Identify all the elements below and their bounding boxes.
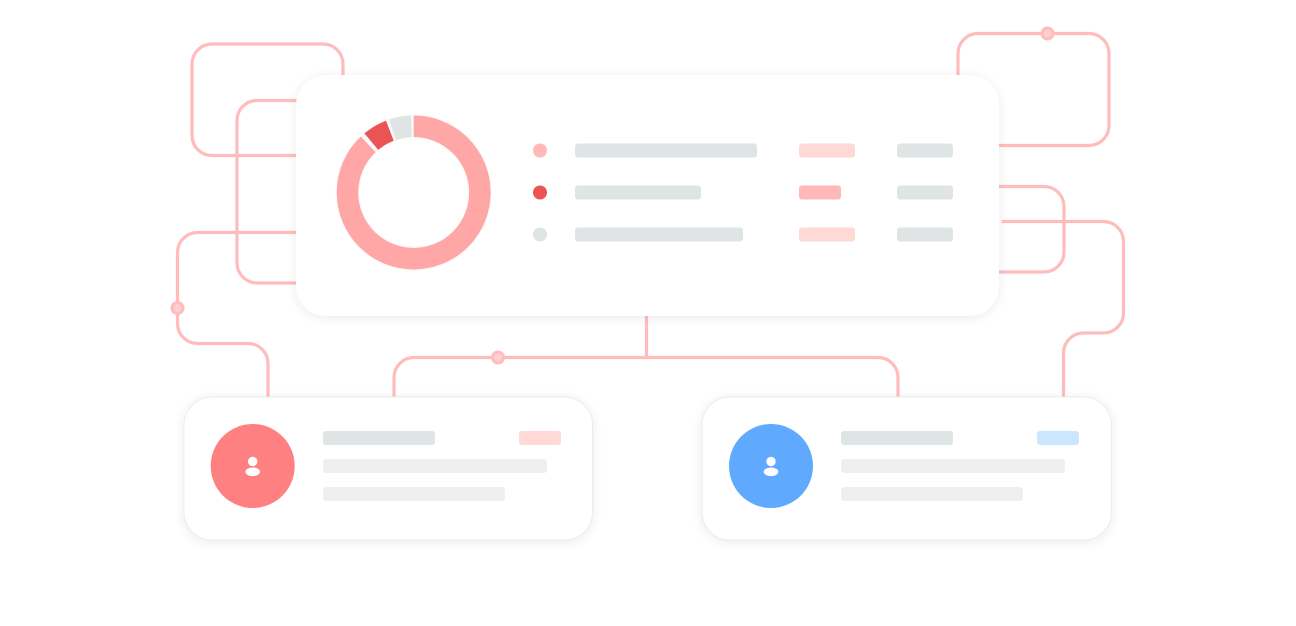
panel: first person card (184, 397, 592, 540)
connector: main card to bottom cards (394, 312, 898, 400)
connector: left side to first card (178, 232, 300, 400)
connector: top-right loop (958, 34, 1109, 146)
node: bottom connector (491, 350, 505, 364)
connector: right small loop (995, 186, 1064, 272)
donut chart (348, 126, 480, 259)
table row 1 (533, 144, 953, 158)
table row 2 (533, 186, 953, 200)
text placeholder lines (323, 431, 561, 501)
connector: top-left loop (192, 44, 343, 156)
panel: main dashboard card (296, 75, 999, 316)
node: left connector (170, 301, 184, 315)
table row 3 (533, 228, 953, 242)
node: top-right connector (1040, 26, 1054, 40)
avatar: blue (729, 424, 813, 508)
avatar: red (211, 424, 295, 508)
connector lines (178, 34, 1109, 400)
text placeholder lines (841, 431, 1079, 501)
panel: second person card (702, 397, 1112, 540)
connector: inner left loop (237, 100, 300, 283)
connector: right long line to second card (1002, 222, 1124, 400)
